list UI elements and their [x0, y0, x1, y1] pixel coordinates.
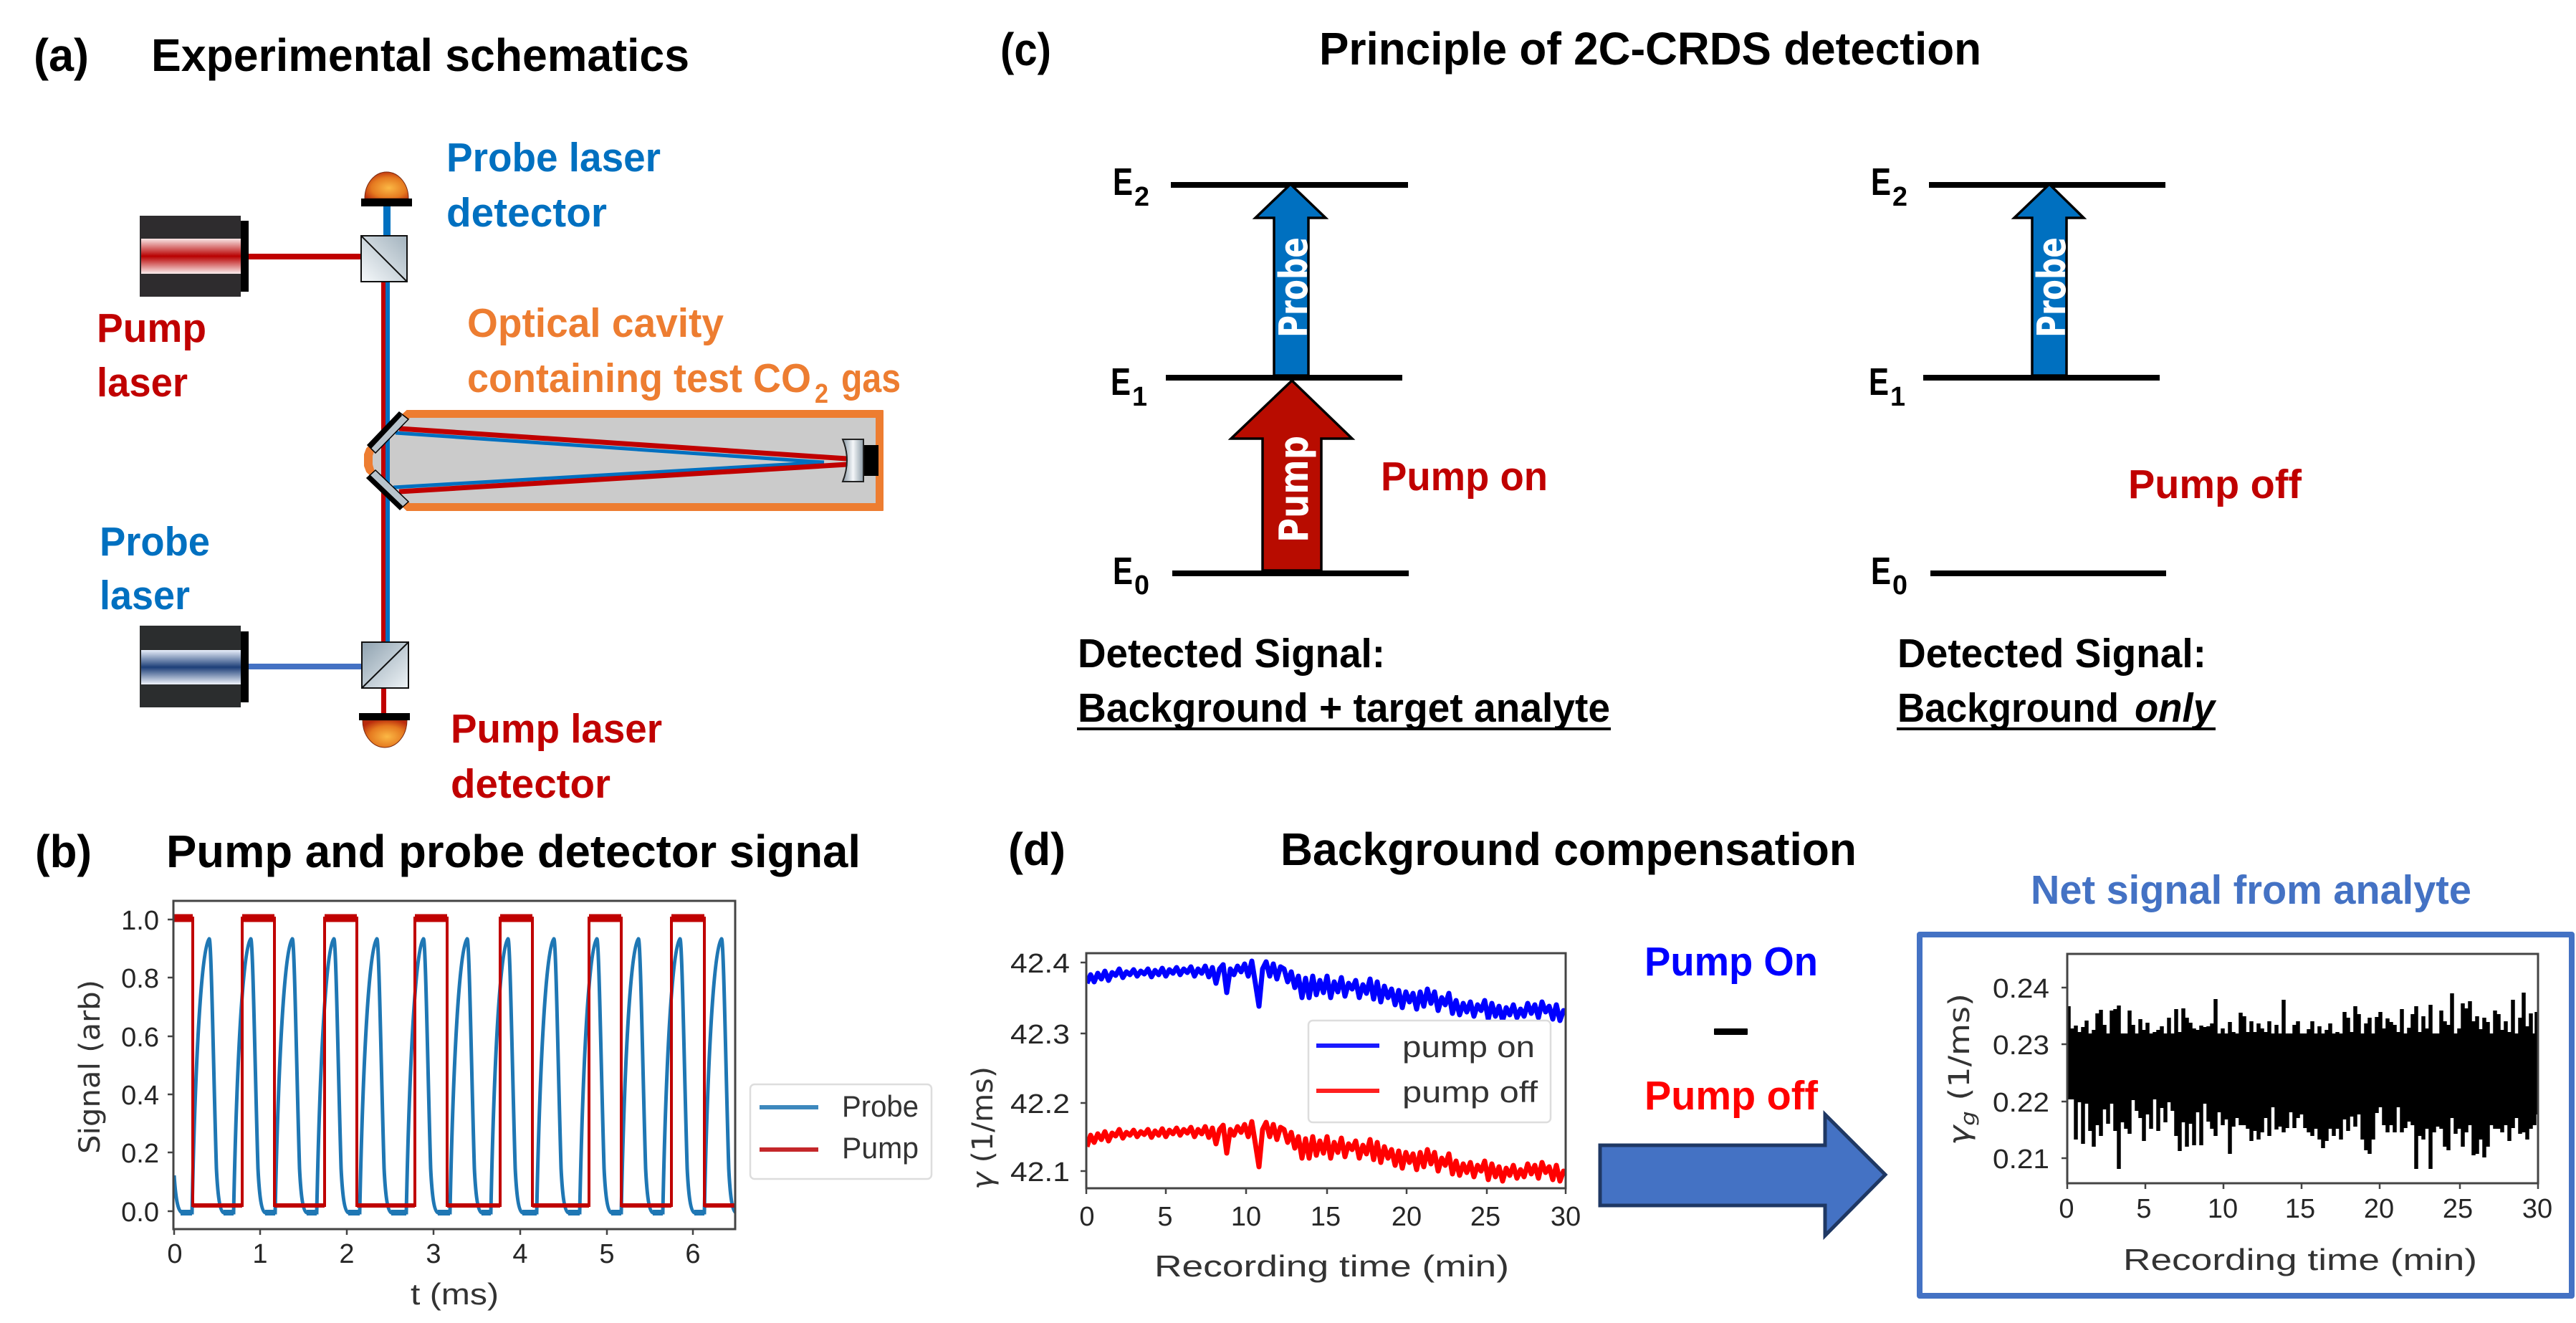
- label: pump on: Pump On: [1644, 939, 1818, 985]
- x axis tick labels: 0: [2059, 1194, 2074, 1224]
- E1 label: [1869, 360, 1905, 412]
- E2 label: E: [1113, 161, 1133, 204]
- label: optical cavity: containing test CO: [467, 355, 811, 401]
- panel a heading: Experimental schematics: [151, 29, 689, 81]
- icon: probe laser: [140, 626, 249, 707]
- legend: [750, 1084, 932, 1179]
- detected signal: background only: Background: [1897, 685, 2119, 731]
- y axis tick labels: 0.21: [1993, 1145, 2049, 1175]
- E1 label: E: [1869, 360, 1889, 403]
- chart: pump on and pump off decay rates: [967, 949, 1581, 1283]
- x axis label: Recording time (min): [2123, 1243, 2477, 1276]
- E2 label: E: [1871, 161, 1891, 204]
- arrow: subtraction result: [1600, 1114, 1885, 1236]
- y axis tick labels: [121, 906, 159, 1228]
- E0 label: E: [1871, 550, 1891, 593]
- y axis label: γ: [1943, 1111, 1980, 1145]
- x axis tick labels: 2: [339, 1239, 355, 1269]
- pump on trace: [1087, 961, 1566, 1021]
- pump trace: [173, 918, 735, 1205]
- panel d heading: Background compensation: [1280, 823, 1857, 875]
- icon: lower beam splitter: [362, 642, 408, 688]
- x axis tick labels: 5: [599, 1239, 615, 1269]
- panel b heading: Pump and probe detector signal: [166, 826, 861, 877]
- icon: upper beam splitter: [361, 236, 407, 282]
- detected signal: background + target analyte: Background + target analyte: [1078, 685, 1610, 731]
- x axis tick labels: 30: [2522, 1194, 2552, 1224]
- y axis tick labels: 0.8: [121, 964, 159, 994]
- chart: detector signal: [74, 901, 932, 1311]
- E0 label: [1113, 550, 1149, 601]
- label: optical cavity: gas: [841, 355, 901, 401]
- x axis tick labels: 0: [1079, 1202, 1095, 1232]
- label: pump laser: laser: [97, 360, 188, 406]
- x axis tick labels: 5: [2136, 1194, 2152, 1224]
- x axis tick labels: 15: [1311, 1202, 1341, 1232]
- plot frame and ticks: [1081, 953, 1566, 1194]
- legend: Probe: [842, 1089, 919, 1123]
- energy diagram: pump on: [1111, 161, 1409, 601]
- label: pump on: Pump on: [1381, 454, 1548, 500]
- label: optical cavity: [467, 300, 901, 409]
- label: probe laser detector: detector: [446, 190, 607, 236]
- panel c heading: Principle of 2C-CRDS detection: [1319, 23, 1981, 75]
- legend: [1308, 1021, 1551, 1122]
- probe laser beam: [249, 664, 362, 669]
- panel d: background compensation: [967, 823, 2572, 1296]
- y axis tick labels: 0.24: [1993, 974, 2049, 1004]
- label: probe laser: laser: [100, 573, 190, 618]
- arrow: probe: Probe: [2029, 237, 2074, 338]
- y axis tick labels: 0.6: [121, 1023, 159, 1053]
- label: pump off: Pump off: [1644, 1073, 1819, 1119]
- y axis label: γ (1/ms): [967, 1066, 1000, 1190]
- label: pump laser detector: detector: [451, 761, 611, 807]
- y axis tick labels: 42.1: [1010, 1157, 1070, 1188]
- legend: pump off: [1402, 1075, 1538, 1109]
- legend: Pump: [842, 1131, 919, 1165]
- y axis label: Signal (arb): [74, 980, 107, 1154]
- icon: end cavity mirror: [843, 439, 878, 482]
- y axis tick labels: 0.2: [121, 1139, 159, 1169]
- combined beam path: [381, 206, 391, 713]
- optical cavity: [365, 411, 883, 510]
- E0 label: [1871, 550, 1907, 601]
- arrow: pump: Pump: [1271, 436, 1318, 543]
- E2 label: 2: [1134, 182, 1149, 212]
- pump off trace: [1087, 1122, 1566, 1181]
- y axis tick labels: 42.3: [1010, 1020, 1070, 1050]
- y axis tick labels: 42.4: [1010, 949, 1070, 979]
- label: probe laser detector: Probe laser: [446, 135, 661, 181]
- panel b letter: (b): [35, 826, 92, 877]
- x axis tick labels: 3: [426, 1239, 441, 1269]
- label: pump laser: [97, 305, 206, 406]
- label: probe laser detector: [446, 135, 661, 236]
- panel b: pump and probe detector signal: [35, 826, 932, 1311]
- x axis tick labels: 5: [1157, 1202, 1173, 1232]
- E1 label: [1111, 360, 1147, 412]
- x axis tick labels: [167, 1239, 701, 1269]
- E0 label: E: [1113, 550, 1133, 593]
- x axis tick labels: 1: [252, 1239, 268, 1269]
- E1 label: 1: [1132, 382, 1147, 412]
- y axis label: (1/ms): [1943, 993, 1976, 1111]
- panel c letter: (c): [1000, 24, 1051, 75]
- x axis tick labels: [1079, 1202, 1581, 1232]
- label: pump laser: Pump: [97, 305, 206, 351]
- y axis tick labels: 0.0: [121, 1198, 159, 1228]
- x axis tick labels: 20: [2364, 1194, 2394, 1224]
- probe trace: [174, 939, 736, 1213]
- x axis tick labels: 10: [1231, 1202, 1261, 1232]
- E2 label: [1113, 161, 1149, 212]
- label: probe laser: [100, 519, 210, 618]
- arrow: probe: [1255, 184, 1326, 376]
- x axis tick labels: 6: [685, 1239, 701, 1269]
- y axis tick labels: 1.0: [121, 906, 159, 936]
- x axis label: t (ms): [411, 1277, 499, 1311]
- icon: lower cavity mirror: [367, 470, 408, 510]
- arrow: probe: [2014, 184, 2084, 376]
- y axis tick labels: 42.2: [1010, 1089, 1070, 1119]
- energy diagram: pump off: [1869, 161, 2166, 601]
- E0 label: 0: [1134, 570, 1149, 601]
- detected signal: background only: [1897, 631, 2217, 731]
- x axis tick labels: 25: [1470, 1202, 1500, 1232]
- label: pump laser detector: [451, 706, 662, 807]
- panel a: experimental schematics: [34, 29, 901, 807]
- icon: upper cavity mirror: [368, 412, 408, 453]
- panel c: principle of 2C-CRDS detection: [1000, 23, 2302, 731]
- x axis tick labels: 15: [2285, 1194, 2315, 1224]
- x axis tick labels: 25: [2443, 1194, 2473, 1224]
- icon: probe laser detector: [361, 172, 412, 206]
- E0 label: 0: [1892, 570, 1907, 601]
- y axis tick labels: [1010, 949, 1070, 1188]
- plot frame and ticks: [168, 901, 735, 1235]
- panel d letter: (d): [1008, 823, 1066, 875]
- panel a letter: (a): [34, 29, 89, 81]
- icon: pump laser detector: [359, 713, 410, 748]
- E2 label: [1871, 161, 1907, 212]
- label: optical cavity: Optical cavity: [467, 300, 724, 346]
- legend: pump on: [1402, 1030, 1535, 1064]
- x axis tick labels: 0: [167, 1239, 183, 1269]
- minus sign: [1714, 1028, 1748, 1035]
- y axis tick labels: 0.23: [1993, 1031, 2049, 1061]
- detected signal: background + target analyte: Detected Signal:: [1078, 631, 1385, 677]
- E1 label: 1: [1890, 382, 1905, 412]
- arrow: probe: Probe: [1271, 237, 1316, 338]
- chart: net signal: [1943, 954, 2552, 1276]
- net signal noise trace: [2067, 993, 2538, 1169]
- x axis tick labels: 20: [1392, 1202, 1422, 1232]
- x axis tick labels: 10: [2208, 1194, 2238, 1224]
- label: optical cavity: 2: [815, 379, 828, 409]
- label: pump laser detector: Pump laser: [451, 706, 662, 752]
- x axis label: Recording time (min): [1154, 1249, 1509, 1283]
- E2 label: 2: [1892, 182, 1907, 212]
- y axis label: g: [1956, 1111, 1980, 1126]
- plot frame and ticks: [2062, 954, 2538, 1189]
- intra-cavity beams: [393, 429, 847, 492]
- detected signal: background only: only: [2135, 685, 2217, 731]
- heading: net signal from analyte: Net signal from analyte: [2031, 867, 2471, 913]
- pump laser beam: [249, 254, 362, 259]
- label: probe laser: Probe: [100, 519, 210, 565]
- detected signal: background only: Detected Signal:: [1897, 631, 2206, 677]
- x axis tick labels: 30: [1551, 1202, 1581, 1232]
- panel: net signal box: [1920, 935, 2572, 1296]
- label: pump off: Pump off: [2128, 462, 2302, 507]
- y axis tick labels: 0.4: [121, 1081, 159, 1111]
- y axis tick labels: 0.22: [1993, 1088, 2049, 1118]
- arrow: pump: [1231, 381, 1352, 570]
- y axis tick labels: [1993, 974, 2049, 1175]
- x axis tick labels: 4: [512, 1239, 528, 1269]
- x axis tick labels: [2059, 1194, 2552, 1224]
- icon: pump laser: [140, 216, 249, 297]
- detected signal: background + target analyte: [1077, 631, 1611, 731]
- E1 label: E: [1111, 360, 1131, 403]
